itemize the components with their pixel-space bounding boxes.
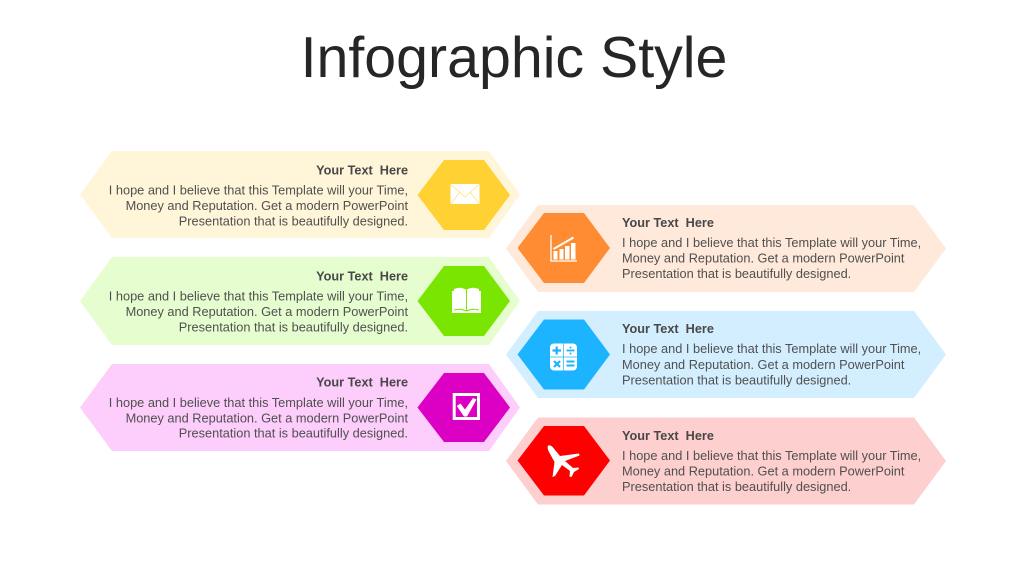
panel: calculator [506,311,946,398]
text block [109,376,408,440]
hexagon [418,373,510,442]
hexagon [418,266,510,336]
banner background [506,205,946,292]
text block: Money and Reputation. Get a modern PowerPoint [622,357,905,372]
text block [622,429,921,494]
text block: Presentation that is beautifully designed. [622,479,851,494]
text block: I hope and I believe that this Template will your Time, [109,288,408,304]
text block: Presentation that is beautifully designed. [179,426,408,440]
text block: Your Text Here [622,322,714,336]
text block: Presentation that is beautifully designed. [179,320,408,334]
text block: Money and Reputation. Get a modern PowerPoint [622,250,905,266]
text block: Your Text Here [622,429,714,443]
banner background [80,257,520,345]
hexagon [418,160,510,230]
panel: book [80,257,520,345]
panel: chart [506,205,946,292]
text block: Your Text Here [316,270,408,284]
text block: Presentation that is beautifully designed. [622,266,851,281]
text block: Your Text Here [316,376,408,390]
icon: checked box [454,394,478,418]
hexagon [518,320,610,390]
hexagon [518,213,610,283]
icon: bar chart [551,235,577,261]
banner background [506,418,946,504]
text block: Money and Reputation. Get a modern PowerPoint [126,198,408,213]
icon: calculator [550,344,577,370]
text block [622,216,921,281]
icon: envelope [450,184,480,204]
text block: Money and Reputation. Get a modern PowerPoint [126,410,408,426]
banner background [80,364,520,451]
text block [109,270,408,334]
title: Infographic Style [301,26,727,90]
text block: Presentation that is beautifully designed. [179,214,408,228]
text block [109,164,408,228]
text block: Money and Reputation. Get a modern PowerPoint [126,304,408,319]
icon: airplane [548,445,580,477]
banner background [80,151,520,238]
panel: airplane [506,418,946,504]
text block [622,322,921,388]
text block: I hope and I believe that this Template will your Time, [109,182,408,198]
text block: I hope and I believe that this Template will your Time, [622,235,921,250]
text block: I hope and I believe that this Template will your Time, [622,448,921,463]
panel: mail [80,151,520,238]
text block: I hope and I believe that this Template will your Time, [109,395,408,410]
panel: checkbox [80,364,520,451]
text block: Money and Reputation. Get a modern PowerPoint [622,464,905,478]
text block: I hope and I believe that this Template will your Time, [622,341,921,356]
text block: Your Text Here [622,216,714,230]
text block: Presentation that is beautifully designed. [622,372,851,388]
icon: open book [452,288,481,313]
hexagon [518,426,610,496]
text block: Your Text Here [316,164,408,178]
banner background [506,311,946,398]
